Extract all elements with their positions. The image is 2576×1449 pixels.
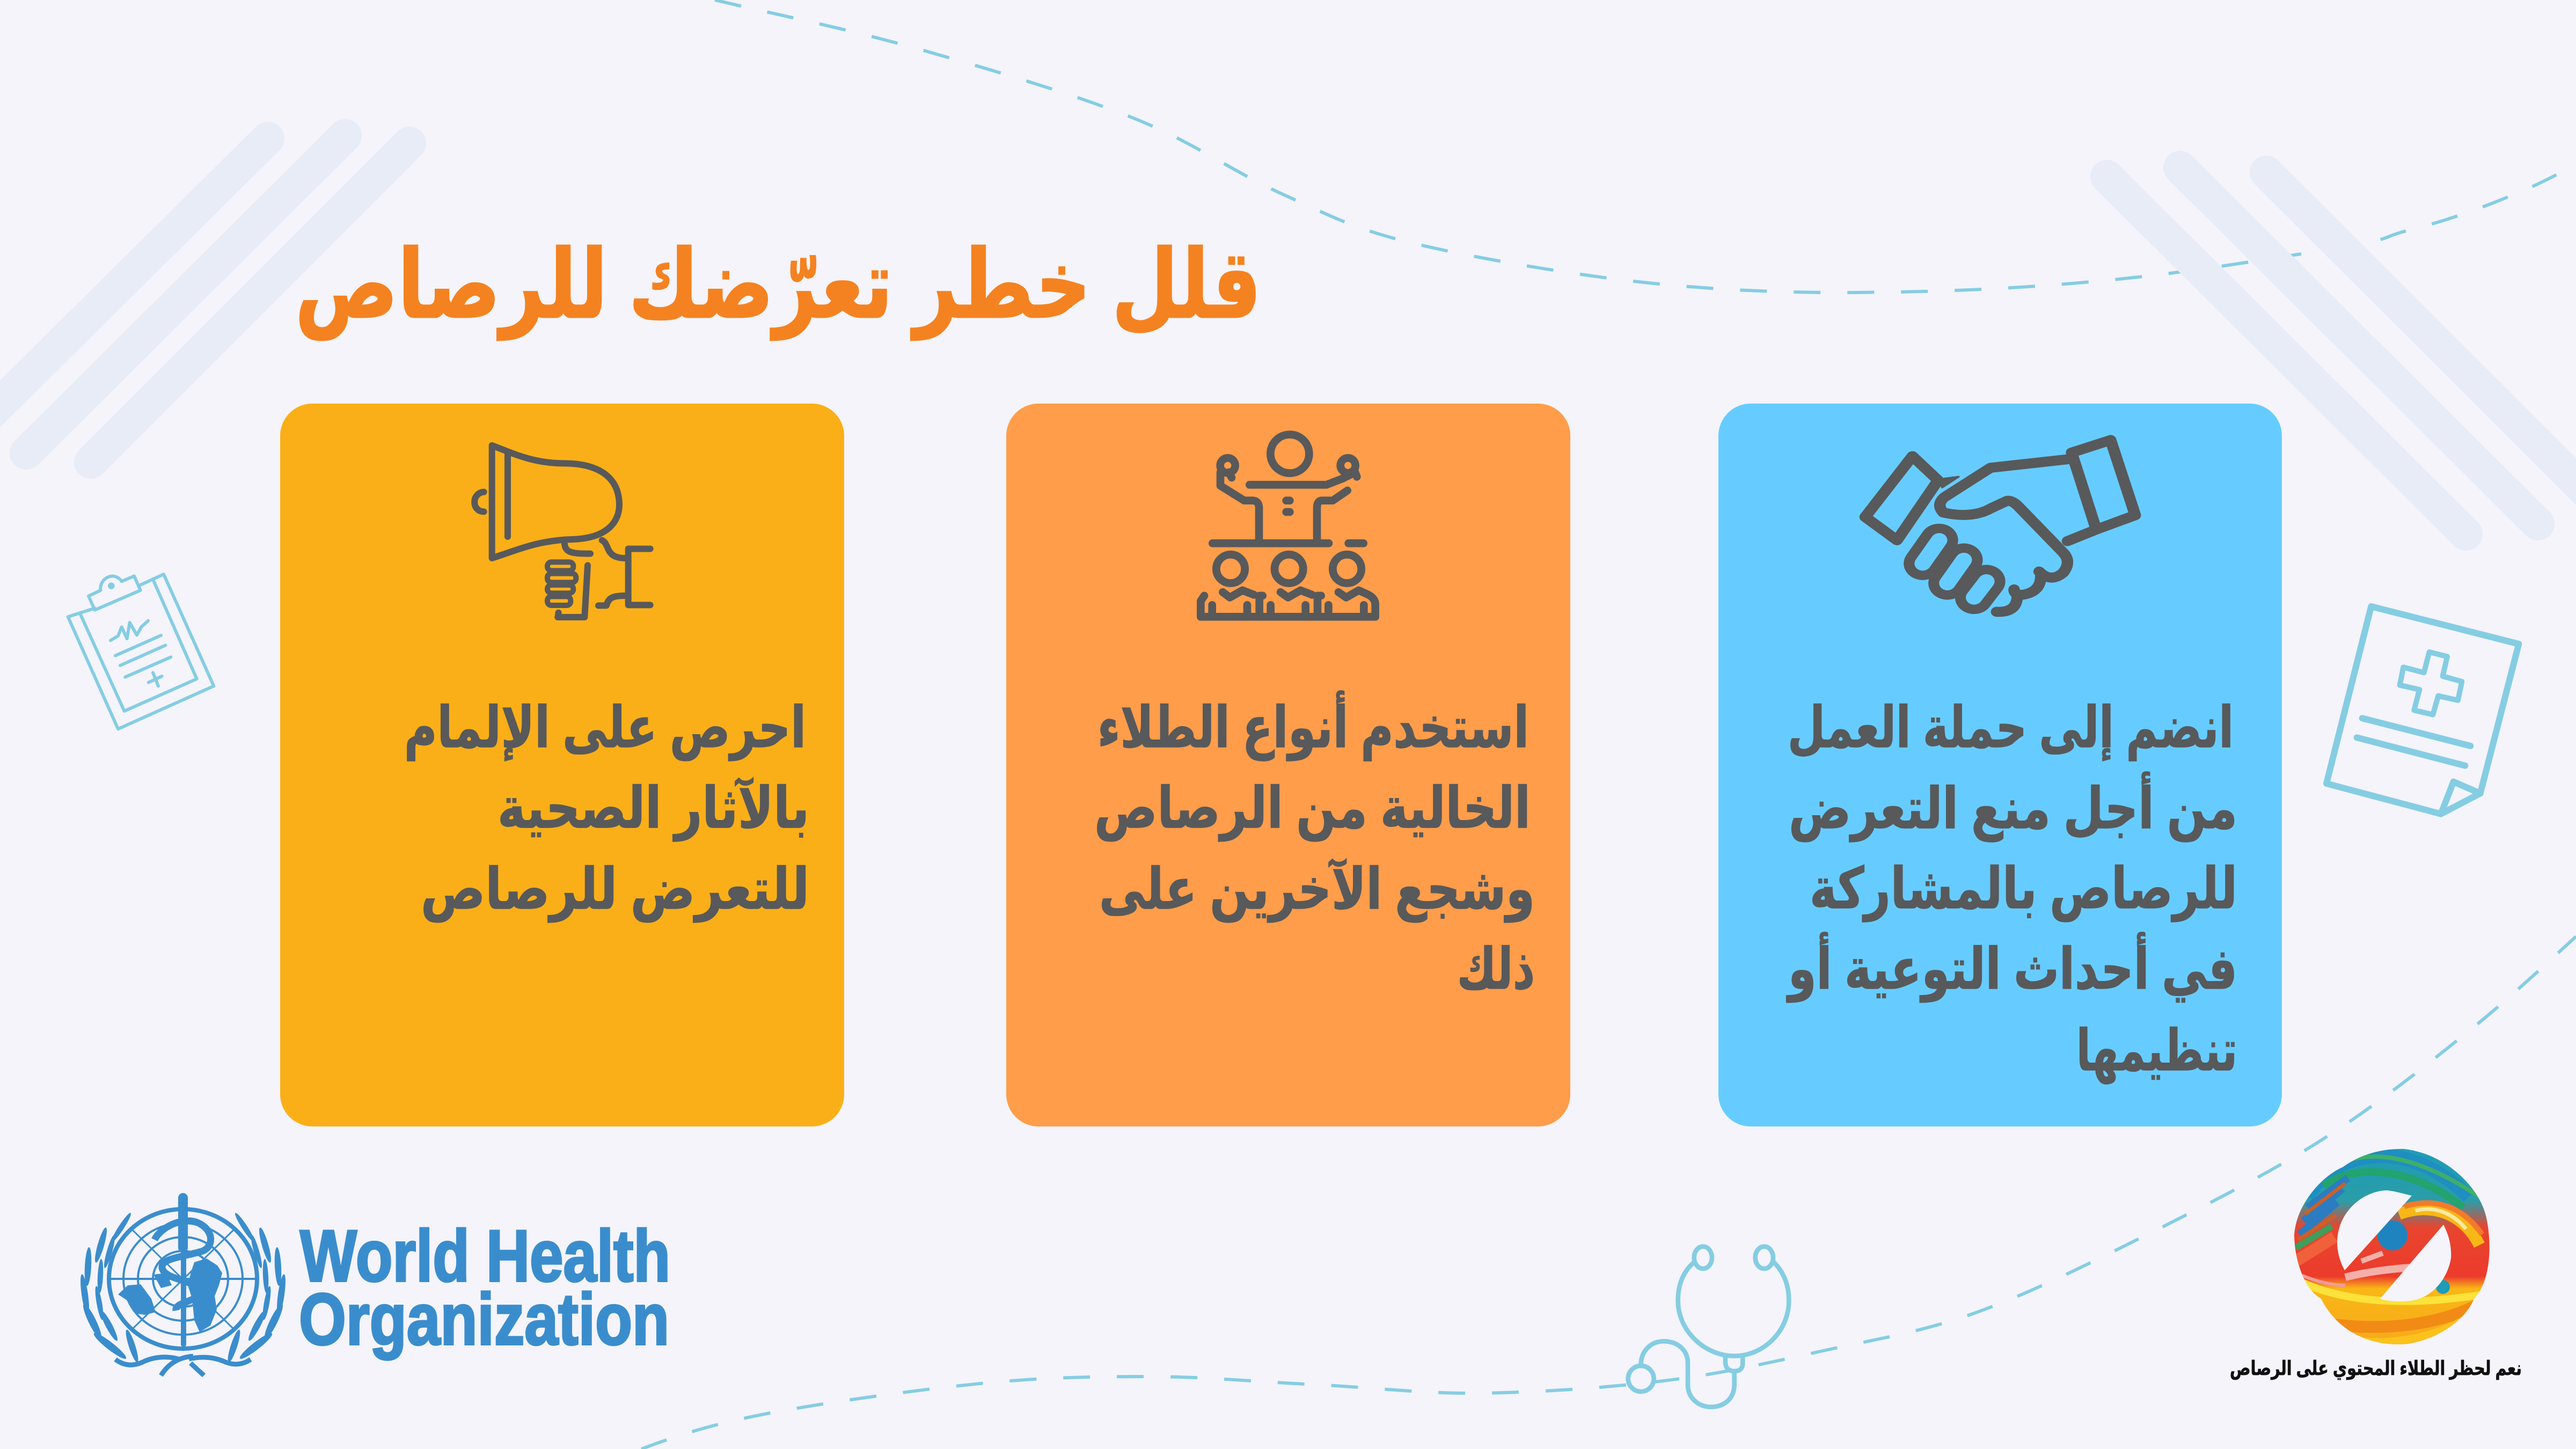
- card 2 text: استخدم أنواع الطلاء: [1097, 691, 1529, 761]
- card 1 background: [280, 404, 844, 1126]
- card 3 text: انضم إلى حملة العمل: [1788, 696, 2234, 761]
- card 3 background: [1718, 404, 2282, 1126]
- WHO emblem: [79, 1198, 287, 1375]
- WHO wordmark: [299, 1215, 670, 1360]
- panel: card 3 join the campaign: [1718, 404, 2282, 1126]
- card 3 text: تنظيمها: [2076, 1019, 2237, 1084]
- icon: stethoscope: [1628, 1247, 1789, 1407]
- card 1 text: [404, 696, 809, 923]
- icon: clipboard: [68, 574, 214, 729]
- panel: card 2 lead-free paints: [1006, 404, 1570, 1126]
- card 1 text: احرص على الإلمام: [404, 696, 806, 761]
- card 2 text: الخالية من الرصاص: [1094, 777, 1531, 841]
- logo: lead paint ban campaign: [2230, 1146, 2522, 1380]
- icon: megaphone in hand: [474, 445, 650, 617]
- icon: medical document: [2326, 606, 2519, 814]
- card 2 text: [1094, 691, 1535, 1001]
- card 2 background: [1006, 404, 1570, 1126]
- WHO wordmark: World Health: [300, 1215, 670, 1297]
- WHO wordmark: Organization: [299, 1278, 669, 1360]
- card 3 text: للرصاص بالمشاركة: [1810, 857, 2237, 922]
- logo: World Health Organization: [79, 1198, 670, 1375]
- card 3 text: [1786, 696, 2237, 1084]
- card 1 text: بالآثار الصحية: [497, 777, 809, 841]
- card 3 text: في أحداث التوعية أو: [1786, 932, 2237, 1003]
- card 3 text: من أجل منع التعرض: [1789, 772, 2237, 842]
- card 2 text: ذلك: [1457, 938, 1535, 1001]
- card 1 text: للتعرض للرصاص: [421, 858, 809, 923]
- icon: speaker and audience: [1201, 435, 1375, 617]
- paint ring mark: [2292, 1146, 2496, 1350]
- panel: card 1 awareness: [280, 404, 844, 1126]
- card 2 text: وشجع الآخرين على: [1099, 858, 1535, 923]
- title: قلل خطر تعرّضك للرصاص: [295, 232, 1261, 340]
- icon: handshake: [1865, 440, 2135, 612]
